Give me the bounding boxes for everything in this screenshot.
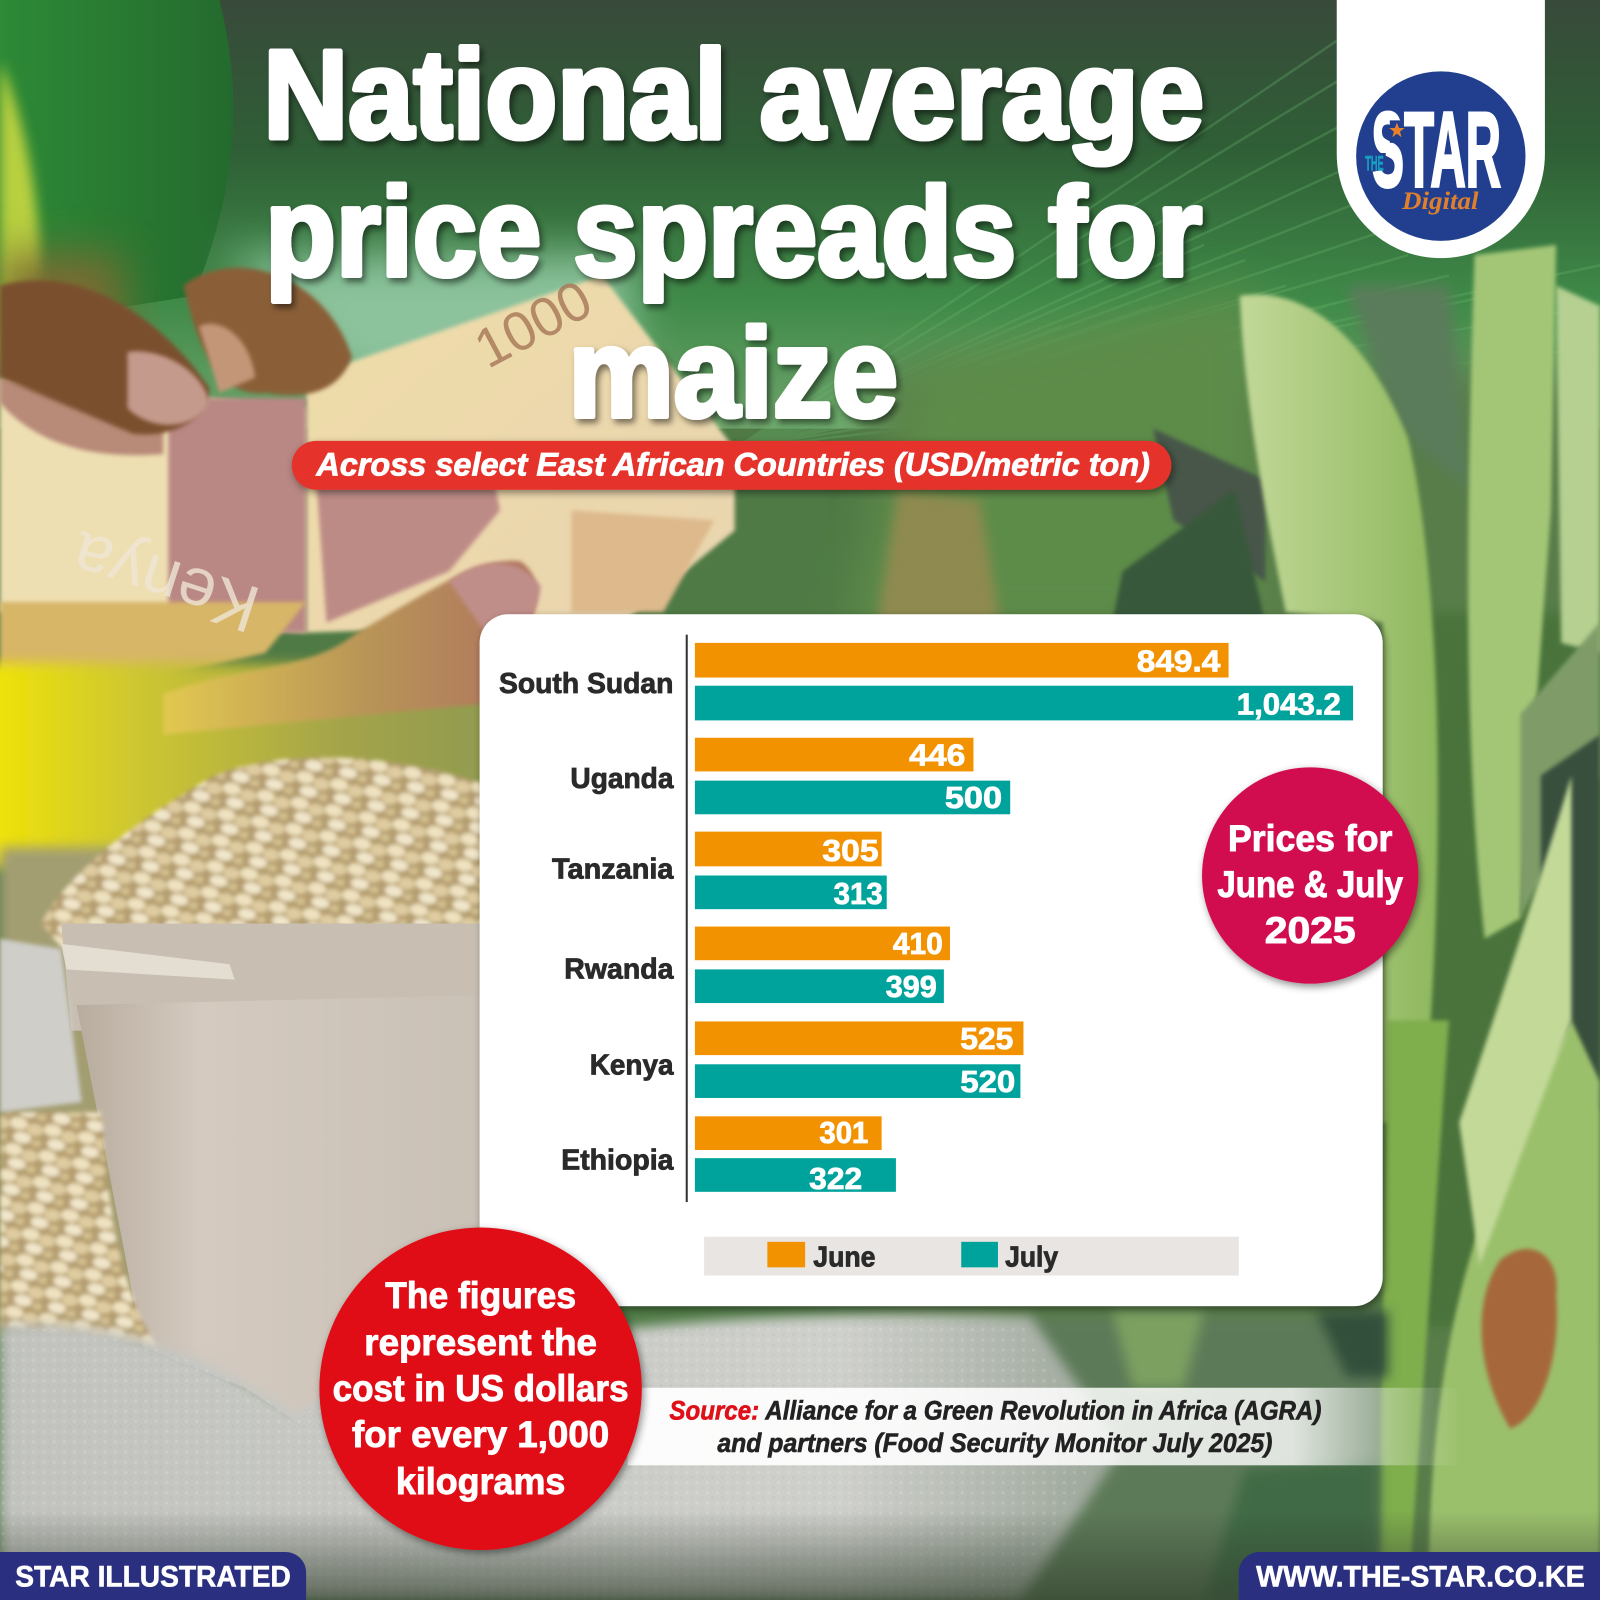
callout: cost explanation: kilograms — [396, 1461, 565, 1502]
callout: cost explanation: cost in US dollars — [333, 1368, 629, 1409]
background: right corn field — [847, 245, 1600, 1600]
background: bank notes — [0, 276, 735, 714]
background: bucket — [61, 923, 490, 1429]
logo tab — [1337, 0, 1545, 258]
title: price spreads for — [265, 161, 1202, 303]
panel: bar chart card — [480, 614, 1383, 1306]
callout: cost explanation — [319, 1228, 642, 1550]
callout: prices for June and July: Prices for — [1228, 818, 1392, 859]
background: white sack — [0, 1314, 1600, 1600]
axis — [686, 635, 688, 1202]
background: grain heap — [41, 757, 490, 959]
bar values: 500 — [945, 781, 1002, 815]
bars: July — [695, 686, 1353, 1192]
background: sack left — [0, 939, 82, 1112]
country labels: Rwanda — [564, 954, 675, 986]
bar values: 520 — [960, 1065, 1015, 1099]
background: fingers — [0, 268, 352, 434]
country labels: Ethiopia — [561, 1144, 675, 1176]
logo wordmark Digital: Digital — [1401, 186, 1480, 215]
bar values: 313 — [834, 877, 883, 911]
callout: prices for June and July — [1202, 767, 1418, 984]
country labels: Uganda — [570, 763, 675, 795]
legend: July — [1005, 1241, 1058, 1273]
footer tab: website: WWW.THE-STAR.CO.KE — [1256, 1561, 1585, 1594]
callout: cost explanation: The figures — [385, 1275, 576, 1316]
legend: June — [813, 1241, 876, 1273]
bar values: 525 — [960, 1022, 1013, 1056]
background: teal glow behind note — [224, 255, 633, 408]
background: yellow glow — [0, 663, 500, 867]
title: National average — [263, 23, 1204, 165]
bar values: 410 — [893, 927, 943, 961]
icon: Kenya note lettering: Kenya — [63, 516, 268, 647]
country labels: South Sudan — [499, 668, 673, 700]
callout: cost explanation: represent the — [364, 1322, 597, 1363]
background: green rays — [735, 41, 1600, 449]
bar values: 1,043.2 — [1237, 687, 1341, 721]
icon: logo star — [1389, 120, 1405, 143]
callout: prices for June and July: 2025 — [1265, 910, 1356, 951]
legend — [704, 1237, 1239, 1276]
footer tab: Star Illustrated — [0, 1552, 306, 1600]
source band: and partners (Food Security Monitor July 2025) — [717, 1428, 1273, 1458]
bar values: 322 — [809, 1162, 862, 1196]
source band: Source: — [669, 1395, 759, 1425]
bar values: 301 — [819, 1116, 868, 1150]
source band: Alliance for a Green Revolution in Africa (AGRA) — [764, 1395, 1322, 1425]
background: grain spill — [0, 1112, 158, 1347]
footer tab: Star Illustrated: STAR ILLUSTRATED — [15, 1561, 291, 1594]
bars: June — [695, 643, 1229, 1150]
title: maize — [568, 301, 898, 443]
icon: logo circle — [1356, 71, 1526, 241]
logo tab: THE — [1365, 151, 1384, 175]
bar values: 849.4 — [1137, 644, 1220, 678]
bar values — [809, 644, 1341, 1196]
title — [263, 23, 1204, 443]
country labels: Kenya — [590, 1049, 675, 1081]
bar values: 305 — [822, 834, 879, 868]
footer tab: website — [1239, 1552, 1600, 1600]
icon: note denomination: 1000 — [464, 268, 602, 380]
bar values: 399 — [886, 970, 937, 1004]
country labels — [499, 668, 675, 1176]
subtitle pill: Across select East African Countries (USD/metric ton) — [315, 446, 1150, 483]
background: thumb — [163, 561, 541, 735]
background: left dark band — [0, 847, 490, 1337]
country labels: Tanzania — [552, 854, 675, 886]
callout: cost explanation: for every 1,000 — [352, 1414, 609, 1455]
background: left green curve — [0, 0, 233, 429]
source band — [628, 1388, 1459, 1465]
bar values: 446 — [909, 738, 965, 772]
callout: prices for June and July: June & July — [1217, 864, 1404, 905]
logo wordmark THE — [1363, 151, 1386, 175]
